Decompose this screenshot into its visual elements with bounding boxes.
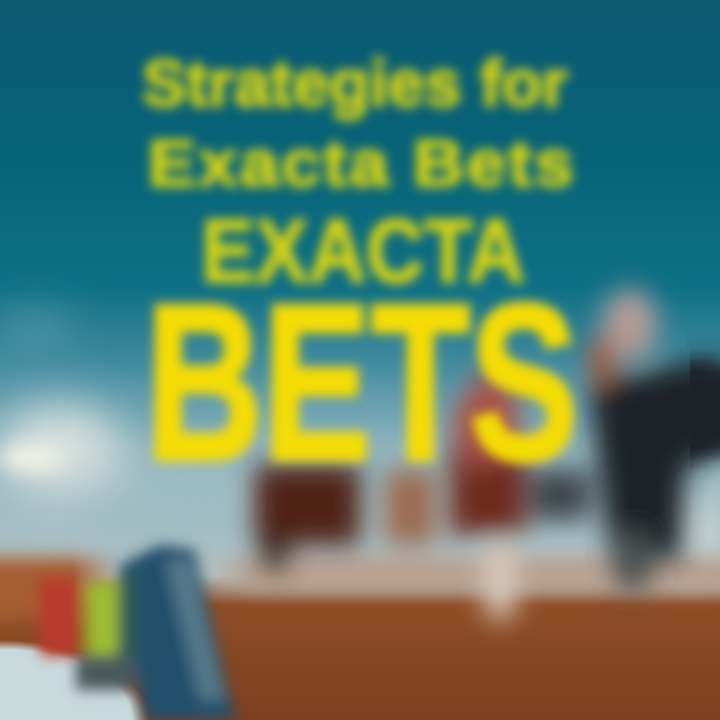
cloud highlight [0, 444, 64, 472]
track dust band [210, 558, 720, 590]
white rail [0, 640, 150, 720]
clouds [0, 314, 720, 565]
horses [255, 289, 720, 620]
heading line: BETS: BETS [146, 259, 578, 507]
heading line: EXACTA: EXACTA [201, 202, 525, 302]
heading line: Exacta Bets: Exacta Bets [148, 126, 576, 200]
left dirt patch [0, 558, 120, 620]
dark horse neck at right edge [690, 365, 720, 455]
heading line: Strategies for: Strategies for [142, 46, 568, 120]
rail and foreground [0, 545, 235, 720]
rail posts and blue jacket [40, 545, 235, 720]
